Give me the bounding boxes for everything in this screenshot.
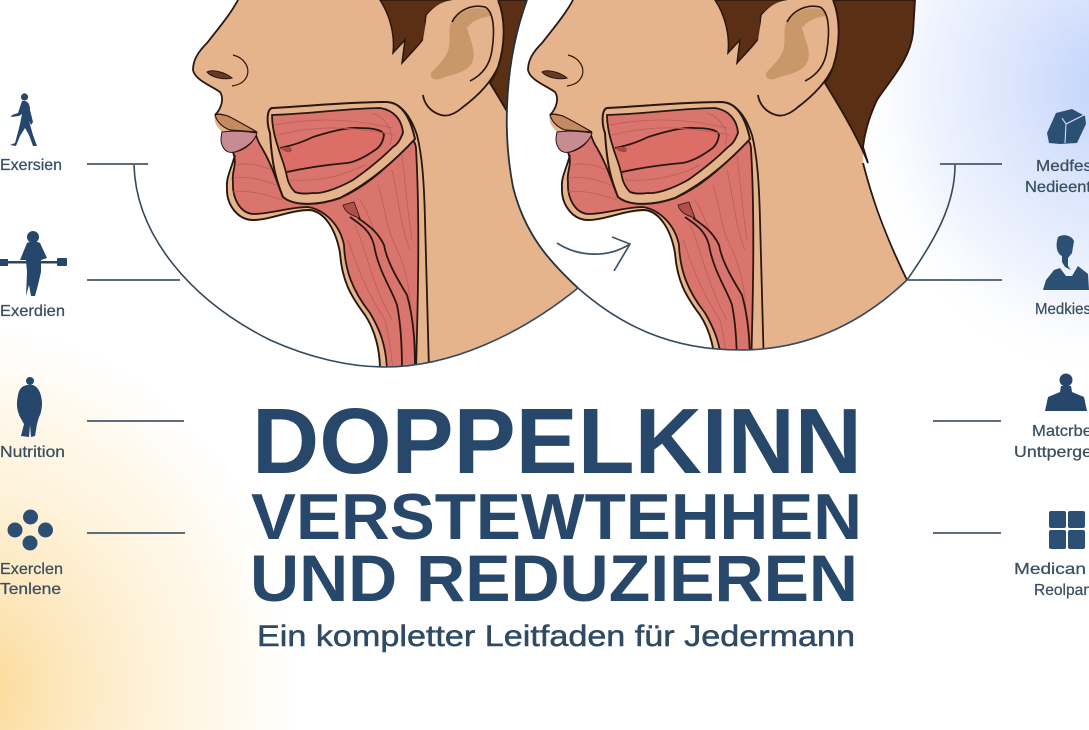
left icon: four dots [8,510,53,550]
subtitle: Ein kompletter Leitfaden für Jedermann [257,620,855,653]
right head anatomy illustration [528,0,935,370]
right label: Medican Reolpar [1014,561,1089,599]
left label: Exerclen Tenlene: Tenlene [0,581,61,598]
right label: Matcrbe Unttperge: Matcrbe [1032,423,1089,440]
right label: Medican Reolpar: Medican [1014,561,1086,578]
title: DOPPELKINN [252,389,862,493]
left label: Exerdien: Exerdien [0,303,65,320]
right icon: grid squares [1049,511,1085,549]
right icon: head and shoulders [1043,235,1089,290]
left head anatomy illustration [193,0,600,370]
left label: Exersien: Exersien [0,157,62,174]
left icon: walking figure [10,93,37,146]
title [250,389,862,615]
right label: Medies Nedieent: Nedieent [1025,179,1089,196]
arrow [557,237,630,271]
left icon: body figure [17,377,42,437]
right label: Matcrbe Unttperge: Unttperge [1014,444,1089,461]
left label: Exerclen Tenlene [0,561,63,598]
left icon: barbell figure [0,231,67,296]
title: VERSTEWTEHHEN [251,480,862,553]
left label: Nutrition: Nutrition [0,444,65,461]
left label: Exerclen Tenlene: Exerclen [0,561,63,578]
right icon: bust figure [1045,374,1087,411]
right label: Medies Nedieent: Medfes [1036,158,1089,175]
right label: Matcrbe Unttperge [1014,423,1089,461]
right label: Medies Nedieent [1025,158,1089,196]
right icon: rock shape [1047,109,1086,144]
circle outlines [134,0,955,367]
title: UND REDUZIEREN [250,541,858,615]
